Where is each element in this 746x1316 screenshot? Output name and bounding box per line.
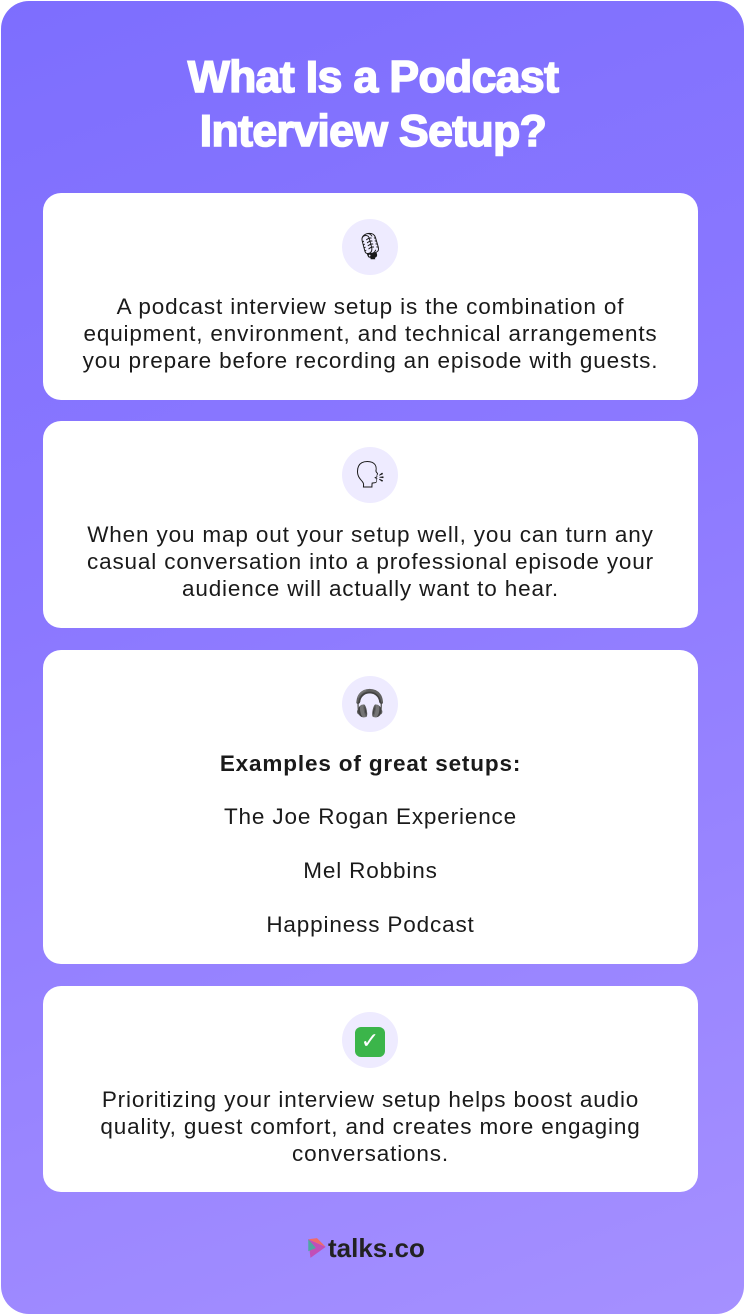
text: conclusion: Prioritizing your interview setup helps boost audio <box>102 1087 639 1112</box>
text: definition: you prepare before recording an episode with guests. <box>83 348 658 373</box>
icon: speaking head: 🗣 <box>353 460 386 490</box>
text: benefit: audience will actually want to hear. <box>182 576 559 601</box>
examples heading: Examples of great setups: <box>220 751 521 776</box>
example list: The Joe Rogan Experience <box>224 804 517 829</box>
title: What Is a Podcast <box>188 53 558 102</box>
title <box>186 53 560 156</box>
text: conclusion <box>100 1087 641 1166</box>
text: conclusion: conversations. <box>292 1141 449 1166</box>
card: definition <box>43 193 698 400</box>
icon: headphones <box>342 676 398 732</box>
text: benefit <box>87 522 654 601</box>
logo: talks.co: talks.co <box>328 1233 425 1263</box>
icon: check mark <box>342 1012 398 1068</box>
card: benefit <box>43 421 698 628</box>
text: benefit: casual conversation into a professional episode your <box>87 549 654 574</box>
example list <box>224 804 517 937</box>
icon: check mark: ✓ <box>361 1029 379 1054</box>
text: conclusion: quality, guest comfort, and creates more engaging <box>100 1114 641 1139</box>
icon: headphones: 🎧 <box>354 689 386 719</box>
title: Interview Setup? <box>200 107 546 156</box>
text: benefit: When you map out your setup well, you can turn any <box>87 522 654 547</box>
card: conclusion <box>43 986 698 1192</box>
text: definition <box>82 294 658 373</box>
example list: Happiness Podcast <box>266 912 475 937</box>
text: definition: equipment, environment, and technical arrangements <box>83 321 658 346</box>
card: examples <box>43 650 698 964</box>
text: definition: A podcast interview setup is the combination of <box>117 294 624 319</box>
icon: microphone <box>342 219 398 275</box>
icon: speaking head <box>342 447 398 503</box>
icon: microphone: 🎙 <box>353 232 386 262</box>
example list: Mel Robbins <box>303 858 438 883</box>
